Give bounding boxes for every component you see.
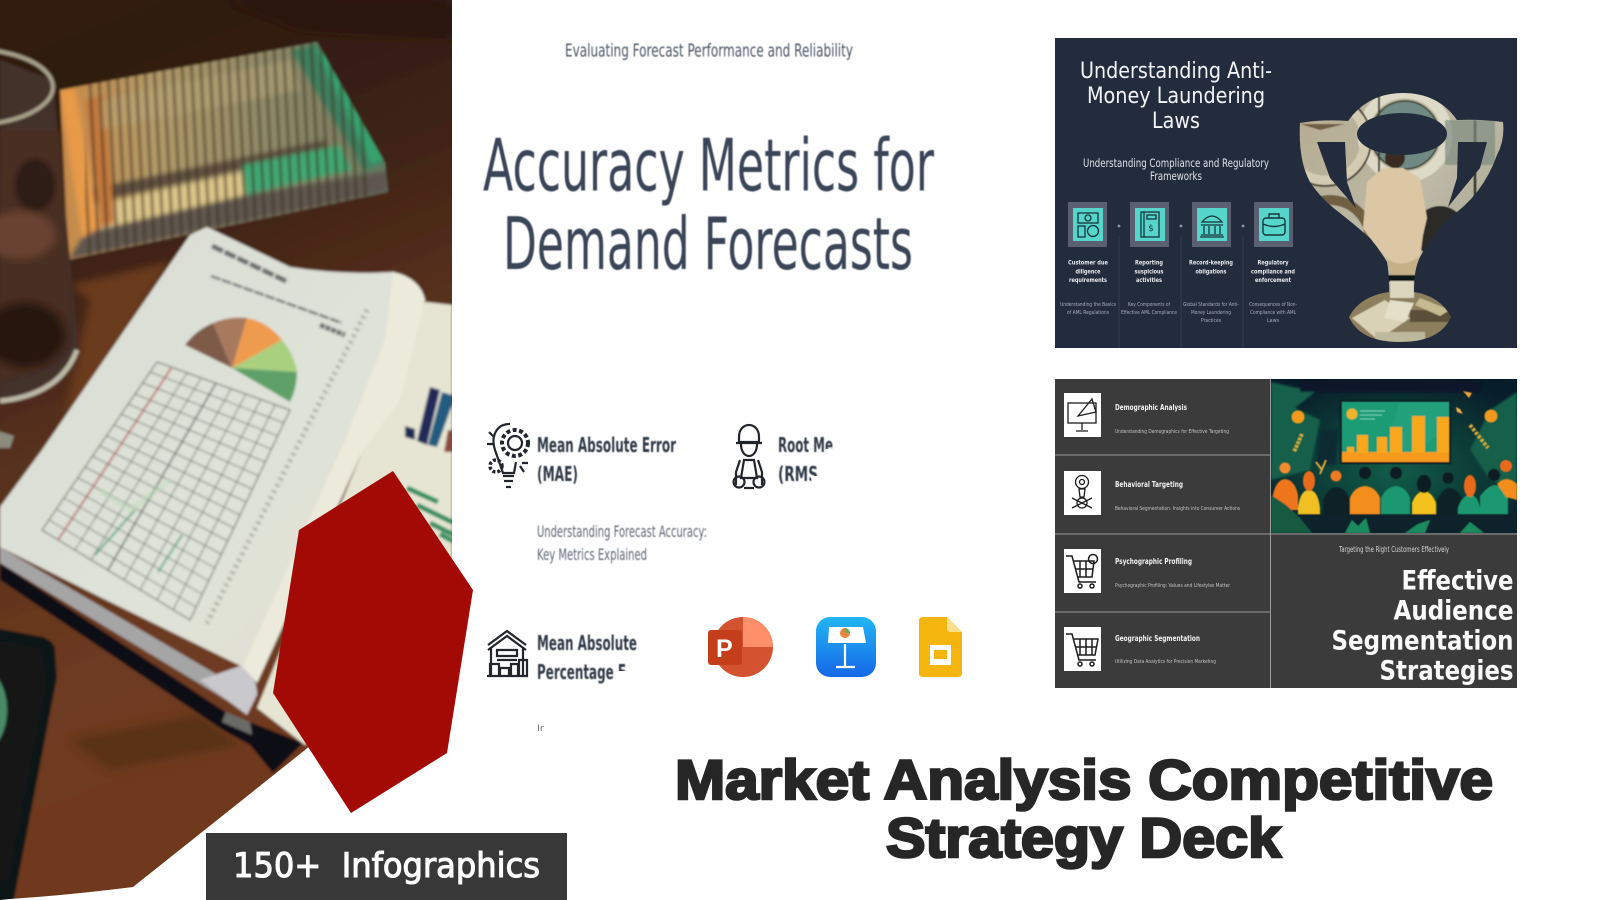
main title: Strategy Deck [886,806,1282,869]
column captions: Laws [1267,318,1279,324]
heading: accuracy metrics: Accuracy Metrics for [483,124,934,208]
icon: worker [734,425,764,488]
column labels: requirements [1069,276,1107,284]
photo: desk with open report [0,0,460,900]
column captions: Consequences of Non- [1249,302,1297,308]
text block: mean absolute error: (MAE) [537,462,578,486]
row: geographic segmentation: Utilizing Data Analytics for Precision Marketing [1115,659,1216,665]
column labels: Reporting [1135,258,1163,266]
icon: Google Slides [919,617,962,677]
column captions: Understanding the Basics [1060,302,1116,308]
text block: mean absolute error [537,433,676,486]
column captions: Global Standards for Anti- [1183,302,1239,308]
column labels: obligations [1196,268,1227,276]
row: demographic analysis: Understanding Demographics for Effective Targeting [1115,429,1229,435]
column labels: activities [1136,276,1162,284]
icon: Keynote [816,617,876,677]
heading: audience segmentation: Strategies [1380,656,1514,686]
text block: root mean squared [778,433,833,486]
heading: audience segmentation: Audience [1394,596,1514,626]
icon: report book [1130,202,1169,247]
icon: customer diligence [1068,202,1107,247]
column labels: suspicious [1134,268,1164,276]
column labels: Record-keeping [1189,258,1233,266]
column labels [1068,258,1295,284]
spiral notebook [50,35,395,270]
heading: laws: Understanding Anti- [1080,58,1272,84]
chart: bars on right page [405,387,456,543]
row: geographic segmentation: Geographic Segmentation [1115,634,1200,643]
icon: PowerPoint: P [716,635,733,663]
trophy cut-outs [1317,113,1487,208]
column captions: Practices [1201,318,1221,324]
row: psychographic profiling: Psychographic Profiling: Values and Lifestyles Matter [1115,583,1231,589]
text block: root mean squared: Root Me [778,433,833,457]
subtitle: compliance [1083,156,1269,183]
text block: mean absolute percentage: Percentage F [537,660,626,684]
kicker: right customers: Targeting the Right Customers Effectively [1338,545,1449,554]
row: behavioral targeting [1064,471,1240,515]
subtitle: compliance: Understanding Compliance and Regulatory [1083,156,1269,170]
row: demographic analysis: Demographic Analysis [1115,403,1187,412]
main title: Market Analysis Competitive [675,748,1493,811]
badge: 150+ Infographics [206,833,567,900]
text block: mean absolute percentage: Mean Absolute [537,631,637,655]
column labels: Regulatory [1258,258,1289,266]
row: psychographic profiling [1064,549,1231,593]
icon: warehouse [487,631,527,676]
icon: glass jar [0,49,77,403]
row: psychographic profiling: Psychographic Profiling [1115,557,1192,566]
text block: forecast accuracy note: Key Metrics Explained [537,545,647,564]
text block: mean absolute percentage [537,631,637,684]
panel: anti-money laundering slide [1055,38,1517,348]
row: behavioral targeting: Behavioral Segmentation: Insights into Consumer Actions [1115,506,1240,512]
grid lines [1055,379,1517,688]
subtitle: compliance: Frameworks [1150,169,1202,183]
text block: forecast accuracy note [537,522,707,564]
kicker: forecast performance: Evaluating Forecast Performance and Reliability [565,40,853,62]
icon: gear lightbulb [487,424,528,487]
icon: bank [1192,202,1231,247]
icon: report book: $ [1148,224,1154,234]
column captions: Compliance with AML [1250,310,1296,316]
chart: pie on page [185,318,297,402]
report heading smudges [207,246,367,623]
text block: mean absolute error: Mean Absolute Error [537,433,676,457]
column captions: of AML Regulations [1067,310,1109,316]
column labels: compliance and [1251,268,1295,276]
row: geographic segmentation [1064,627,1216,671]
decorative red hexagon [273,471,473,813]
open book [0,227,456,773]
column labels: Customer due [1068,258,1109,266]
heading: laws: Money Laundering [1087,83,1265,109]
column labels: diligence [1076,268,1101,276]
heading: accuracy metrics: Demand Forecasts [503,202,913,286]
separators [1118,225,1244,227]
heading: audience segmentation [1332,566,1514,686]
column captions [1060,302,1297,324]
column captions: Key Components of [1128,302,1170,308]
icon: briefcase [1254,202,1293,247]
chart: hand-drawn line grid [42,362,290,620]
badge: 150+ Infographics: 150+ Infographics [233,846,540,886]
text block: root mean squared: (RMS [778,462,818,486]
row: behavioral targeting: Behavioral Targeting [1115,480,1183,489]
column captions: Effective AML Compliance [1121,310,1178,316]
heading: laws [1080,58,1272,134]
audience silhouettes [1271,460,1517,533]
heading: audience segmentation: Effective [1402,566,1514,596]
trophy photo [1300,93,1504,342]
icon: phone [0,628,57,900]
heading: laws: Laws [1152,108,1200,134]
icon: PowerPoint [708,617,773,677]
main title [675,748,1493,869]
text fragment: Ir [537,724,544,734]
column captions: Money Laundering [1191,310,1231,316]
image: audience watching chart [1271,379,1517,533]
heading: accuracy metrics [483,124,934,286]
heading: audience segmentation: Segmentation [1332,626,1514,656]
text block: forecast accuracy note: Understanding Forecast Accuracy: [537,522,707,541]
panel: audience segmentation slide [1055,379,1517,688]
row: demographic analysis [1064,393,1229,437]
column labels: enforcement [1255,276,1291,284]
